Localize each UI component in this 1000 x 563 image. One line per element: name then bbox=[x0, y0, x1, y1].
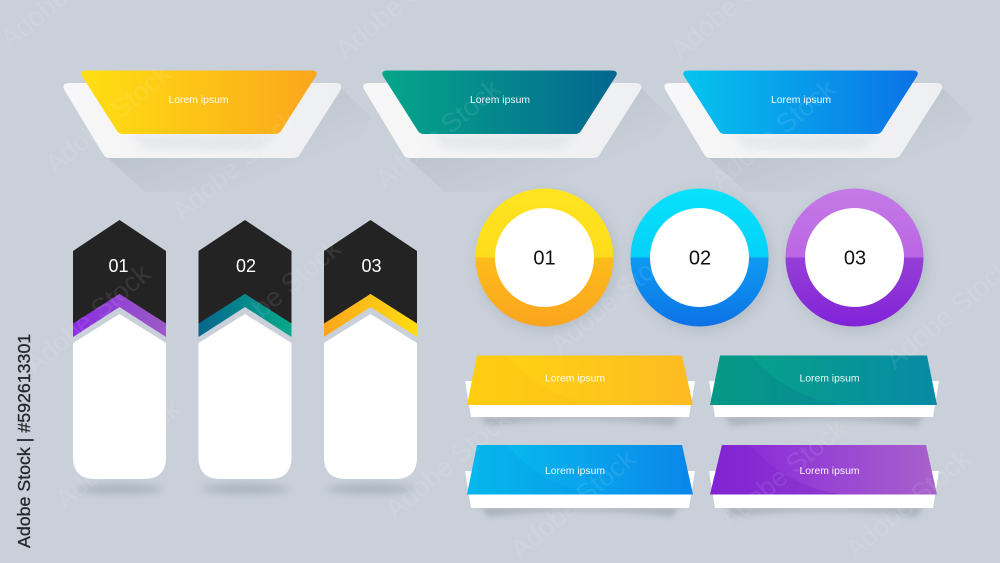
accent chevron yellow bbox=[324, 294, 417, 337]
panel: top trapezoid yellow bbox=[63, 70, 372, 192]
white back plate bbox=[664, 83, 942, 158]
ribbon bbox=[467, 356, 693, 405]
ground shadow bbox=[201, 484, 289, 494]
white back plate bbox=[63, 83, 341, 158]
watermarks: Adobe Stock bbox=[545, 238, 682, 360]
white body bbox=[324, 314, 417, 479]
watermarks: Adobe Stock bbox=[210, 233, 347, 355]
long shadow bbox=[408, 85, 672, 192]
watermarks: Adobe Stock bbox=[840, 443, 977, 563]
black header bbox=[324, 220, 417, 324]
long shadow bbox=[709, 85, 973, 192]
panel: arrow column 01 bbox=[73, 220, 166, 494]
label: Lorem ipsum bbox=[470, 95, 530, 106]
ground shadow bbox=[76, 484, 164, 494]
sheen bbox=[467, 445, 595, 494]
white back bbox=[465, 381, 695, 417]
label: Lorem ipsum bbox=[545, 374, 605, 384]
watermarks: Adobe Stock bbox=[705, 73, 842, 195]
number: 03 bbox=[361, 256, 382, 276]
watermarks: Adobe Stock bbox=[20, 258, 157, 380]
curved shadow bbox=[724, 507, 924, 517]
white body bbox=[73, 314, 166, 479]
ribbon bbox=[467, 445, 693, 494]
ribbon bbox=[710, 356, 937, 405]
white back bbox=[709, 471, 939, 508]
label: Lorem ipsum bbox=[799, 374, 860, 384]
label: Lorem ipsum bbox=[545, 466, 605, 477]
black header bbox=[198, 220, 292, 324]
long shadow bbox=[108, 85, 372, 192]
accent chevron teal bbox=[198, 294, 292, 337]
panel: banner purple bbox=[709, 445, 939, 517]
curved shadow bbox=[724, 416, 924, 426]
number: 02 bbox=[689, 248, 711, 270]
upper ring bbox=[630, 189, 768, 258]
lower ring bbox=[630, 258, 768, 326]
inner shadow bbox=[130, 134, 278, 150]
watermarks: Adobe Stock bbox=[370, 73, 507, 195]
teal trapezoid bbox=[382, 70, 617, 134]
blue trapezoid bbox=[683, 70, 918, 134]
white disc bbox=[650, 208, 749, 307]
number: 01 bbox=[533, 248, 556, 270]
side credit text: Adobe Stock | #592613301 bbox=[14, 334, 34, 548]
curved shadow bbox=[480, 416, 680, 426]
ribbon bbox=[710, 445, 937, 494]
accent chevron purple bbox=[73, 294, 166, 337]
lower ring bbox=[476, 258, 614, 326]
white back plate bbox=[363, 83, 641, 158]
watermarks: Adobe Stock bbox=[380, 403, 517, 525]
label: Lorem ipsum bbox=[771, 95, 831, 106]
lower ring bbox=[786, 258, 924, 326]
white back bbox=[709, 381, 939, 417]
ground shadow bbox=[326, 484, 414, 494]
white back bbox=[465, 471, 695, 508]
sheen bbox=[467, 356, 595, 405]
yellow trapezoid bbox=[81, 70, 317, 134]
label: Lorem ipsum bbox=[799, 466, 860, 477]
panel: top trapezoid teal bbox=[363, 70, 672, 192]
panel: circle 01 bbox=[476, 189, 617, 331]
watermarks: Adobe Stock bbox=[40, 58, 177, 180]
panel: circle 03 bbox=[786, 189, 927, 331]
watermarks: Adobe Stock bbox=[50, 393, 187, 515]
inner shadow bbox=[731, 134, 879, 150]
black header bbox=[73, 220, 166, 324]
white disc bbox=[495, 208, 594, 307]
label: Lorem ipsum bbox=[168, 95, 229, 106]
inner shadow bbox=[430, 134, 578, 150]
white disc bbox=[805, 208, 904, 307]
white body bbox=[198, 314, 292, 479]
upper ring bbox=[476, 189, 614, 258]
drop shadow bbox=[477, 191, 617, 331]
panel: circle 02 bbox=[630, 189, 772, 331]
number: 03 bbox=[844, 248, 866, 270]
panel: arrow column 02 bbox=[198, 220, 292, 494]
panel: top trapezoid blue bbox=[664, 70, 973, 192]
panel: banner yellow bbox=[465, 356, 695, 426]
panel: banner blue bbox=[465, 445, 695, 517]
drop shadow bbox=[632, 191, 772, 331]
curved shadow bbox=[480, 507, 680, 517]
watermarks: Adobe Stock bbox=[167, 105, 304, 227]
sheen bbox=[710, 445, 840, 494]
watermarks: Adobe Stock bbox=[715, 413, 852, 535]
panel: banner teal bbox=[709, 356, 939, 426]
drop shadow bbox=[787, 191, 927, 331]
panel: arrow column 03 bbox=[324, 220, 417, 494]
number: 02 bbox=[236, 256, 256, 276]
number: 01 bbox=[108, 256, 129, 276]
watermarks: Adobe Stock bbox=[505, 443, 642, 563]
sheen bbox=[710, 356, 840, 405]
upper ring bbox=[786, 189, 924, 258]
